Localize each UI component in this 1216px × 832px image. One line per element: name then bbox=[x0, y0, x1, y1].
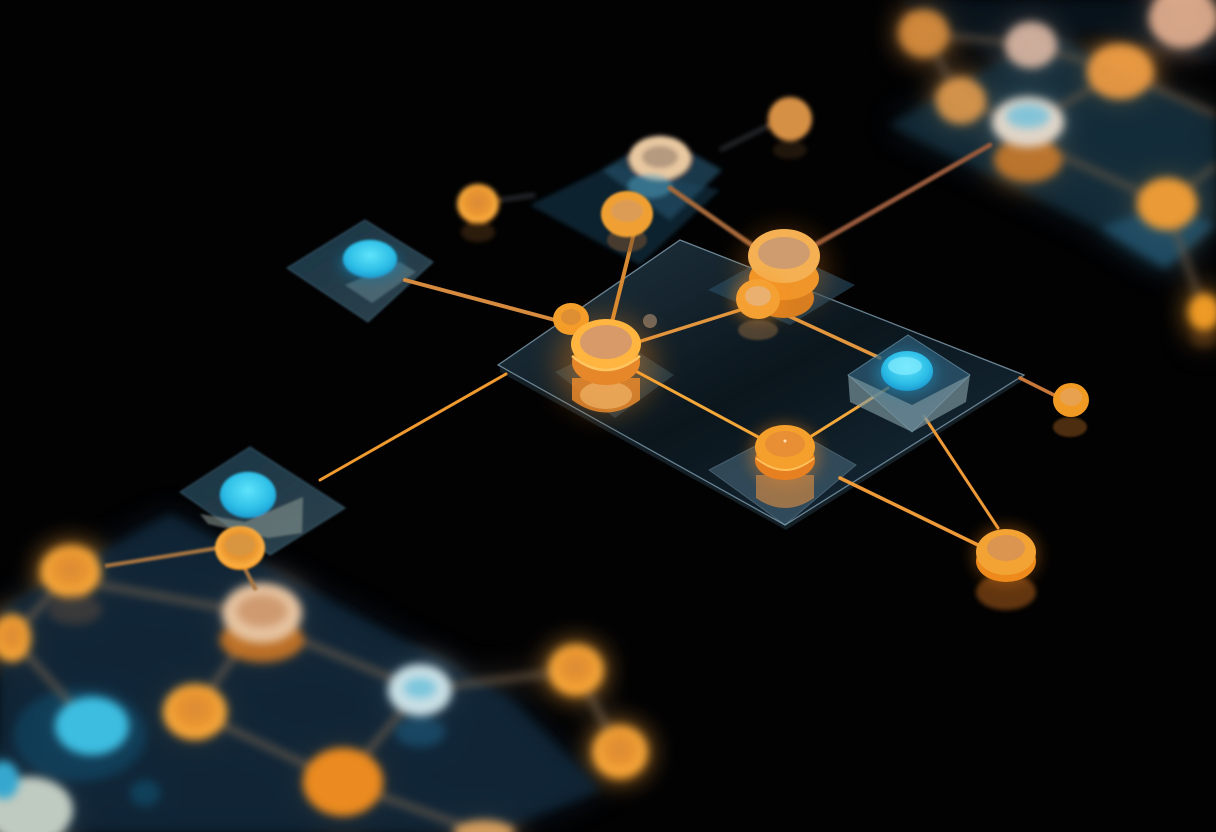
icon: top node stack bbox=[742, 229, 826, 318]
icon: small junction node bbox=[553, 303, 657, 335]
icon: main left node stack bbox=[556, 317, 656, 413]
connector lines bbox=[320, 145, 1054, 545]
icon: lower right node bbox=[972, 525, 1040, 610]
panel: lower left blue tile bbox=[180, 447, 345, 555]
icon: upper connector node bbox=[601, 191, 653, 252]
panel: bottom tile bbox=[709, 428, 856, 525]
icon: small node on upper plane bbox=[732, 277, 784, 340]
panel: rear tile bbox=[708, 250, 855, 325]
panel: central glass plane bbox=[498, 240, 1024, 530]
icon: right outer small node bbox=[1053, 383, 1089, 437]
panel: bottom left blurred plane cluster bbox=[0, 515, 647, 832]
panel: left node tile bbox=[555, 340, 674, 418]
panel: left blue tile bbox=[287, 220, 433, 322]
icon: blue node on right tile bbox=[848, 335, 970, 432]
panel: top right blurred plane cluster bbox=[890, 0, 1216, 347]
panel: top middle blurred plane bbox=[457, 97, 812, 265]
icon: bottom node on tile bbox=[749, 423, 821, 508]
icon: bottom left upper node bbox=[105, 526, 265, 590]
